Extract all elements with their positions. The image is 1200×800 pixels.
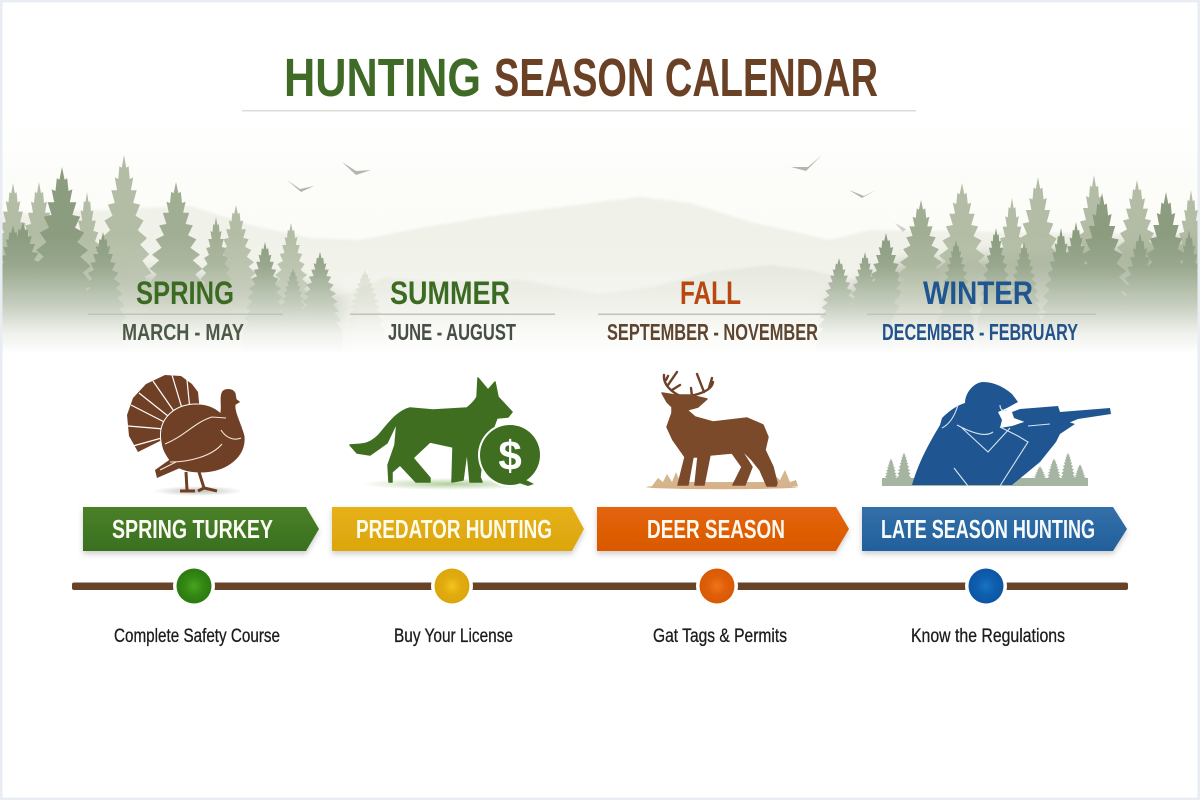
season: summer: JUNE - AUGUST xyxy=(388,319,516,345)
front hills xyxy=(354,266,850,295)
title: SEASON CALENDAR xyxy=(494,48,878,108)
season: winter: DECEMBER - FEBRUARY xyxy=(882,319,1078,345)
banner: late season hunting: LATE SEASON HUNTING xyxy=(881,514,1095,544)
title xyxy=(284,48,878,108)
season: summer: SUMMER xyxy=(390,275,510,311)
forest mass at right xyxy=(827,232,1198,305)
icon: fox with dollar badge: $ xyxy=(498,432,522,479)
banner: spring turkey: SPRING TURKEY xyxy=(112,514,273,544)
fog overlay xyxy=(2,252,1198,358)
season: winter: WINTER xyxy=(923,275,1033,311)
step label: buy your license: Buy Your License xyxy=(394,626,513,647)
title: HUNTING xyxy=(284,48,481,108)
timeline node: blue xyxy=(965,565,1007,607)
banner: deer season xyxy=(597,507,849,551)
timeline node: green xyxy=(173,565,215,607)
season: summer xyxy=(350,275,555,345)
banner: late season hunting xyxy=(862,507,1127,551)
icon: deer xyxy=(646,372,798,489)
season: spring xyxy=(88,275,283,345)
season: fall: FALL xyxy=(680,275,741,311)
banner: predator hunting: PREDATOR HUNTING xyxy=(356,514,552,544)
step label: get tags and permits: Gat Tags & Permits xyxy=(653,626,787,647)
title rule xyxy=(242,110,916,112)
step label: complete safety course: Complete Safety Course xyxy=(114,626,280,647)
season: fall: SEPTEMBER - NOVEMBER xyxy=(607,319,818,345)
season: fall xyxy=(598,275,826,345)
timeline xyxy=(72,565,1128,607)
ground trees xyxy=(882,452,1088,486)
step label: know the regulations: Know the Regulations xyxy=(911,626,1065,647)
back trees xyxy=(2,156,1198,317)
banner: predator hunting xyxy=(332,507,584,551)
icon: fox with dollar badge xyxy=(350,378,542,490)
icon: hunter with rifle xyxy=(882,382,1111,486)
season: spring: MARCH - MAY xyxy=(122,319,244,345)
front trees xyxy=(2,167,1198,339)
season: winter xyxy=(867,275,1096,345)
timeline node: yellow xyxy=(431,565,473,607)
banner: spring turkey xyxy=(83,507,319,551)
back mountain ridge xyxy=(2,197,1180,292)
banner: deer season: DEER SEASON xyxy=(647,514,785,544)
scenery: misty forest and mountains xyxy=(2,155,1198,346)
forest mass at left xyxy=(86,266,349,329)
timeline node: orange xyxy=(696,565,738,607)
birds xyxy=(287,155,906,232)
season: spring: SPRING xyxy=(136,275,234,311)
icon: turkey xyxy=(127,375,245,496)
